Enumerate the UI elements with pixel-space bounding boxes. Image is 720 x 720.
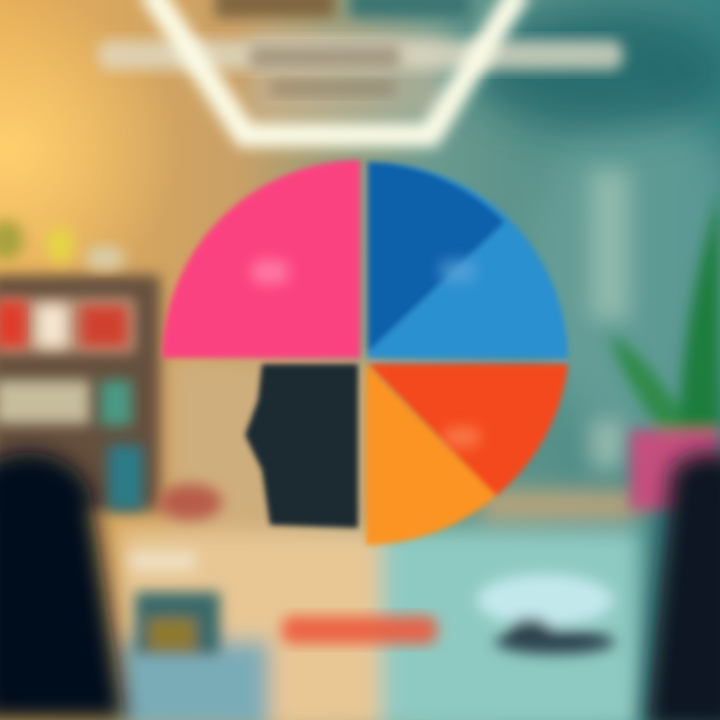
floor — [120, 360, 640, 720]
pie chart — [162, 160, 568, 545]
small table items — [130, 484, 222, 654]
slice: pink — [162, 160, 360, 358]
slice: red orange — [368, 364, 568, 496]
plant — [610, 190, 720, 510]
dark cloud icon — [477, 574, 615, 654]
left shelf — [0, 220, 160, 510]
pie slice labels — [252, 260, 480, 447]
heading text line — [98, 40, 623, 70]
slice: light blue — [368, 162, 568, 358]
right decoration — [590, 170, 630, 470]
foreground silhouette left — [0, 453, 125, 720]
slice: dark — [245, 364, 358, 528]
slice: dark blue — [368, 162, 505, 352]
top frame heading — [98, 0, 623, 135]
slice: orange — [366, 364, 496, 545]
foreground silhouette right — [645, 453, 720, 720]
red bottom text — [282, 616, 437, 644]
